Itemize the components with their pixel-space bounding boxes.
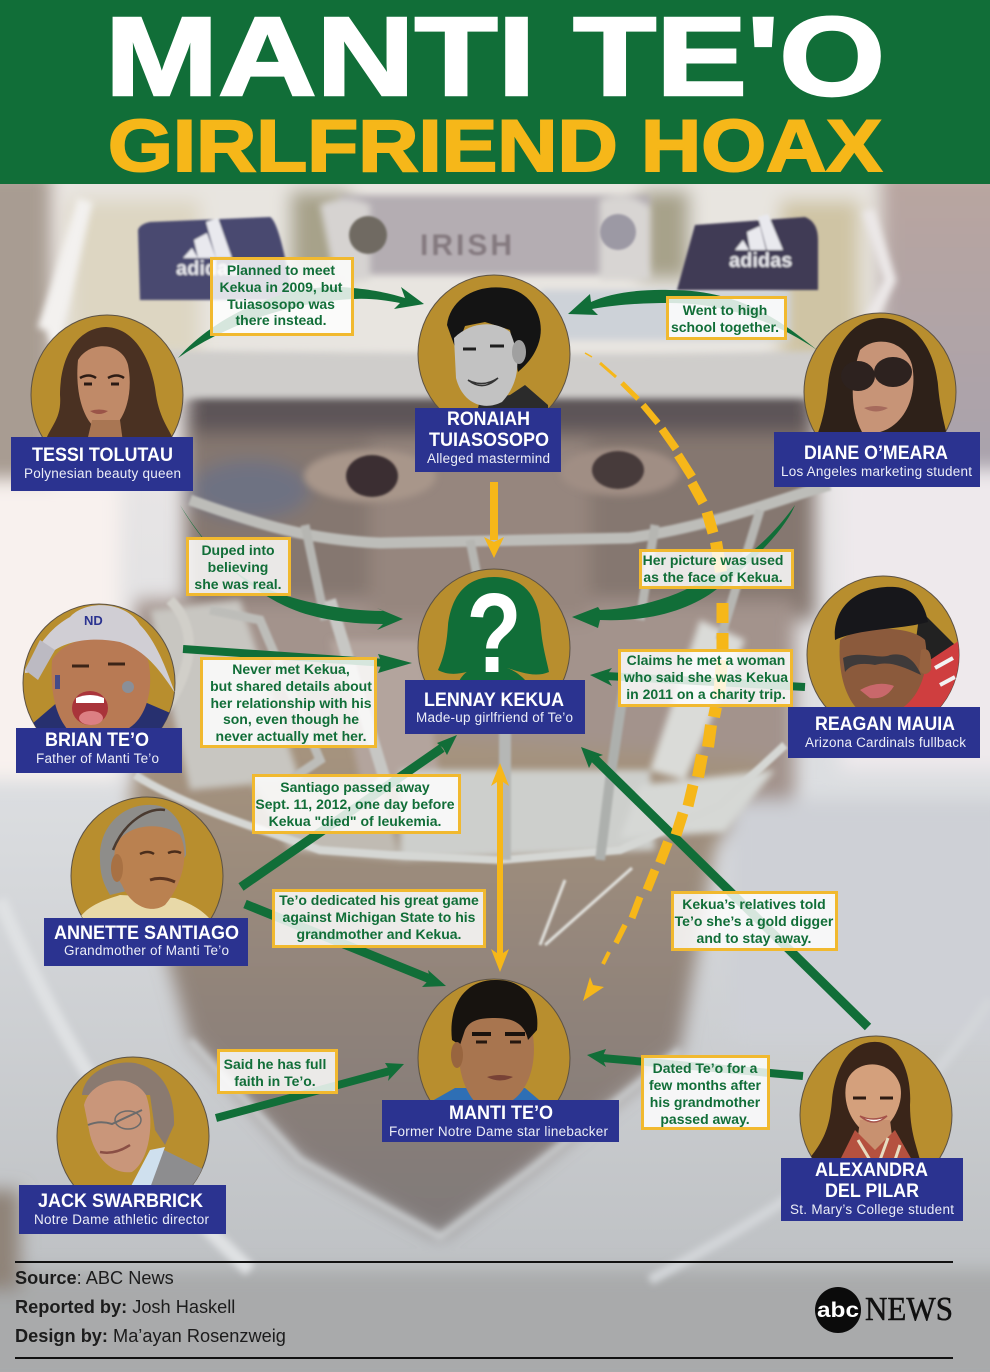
callout: dated Te'o: few months after	[649, 1077, 762, 1093]
label: Annette Santiago	[44, 918, 248, 966]
arrow: Diane to Lennay	[572, 505, 795, 628]
callout: Santiago passed away: Santiago passed away	[280, 779, 430, 795]
arrow: Ronaiah to Lennay, yellow	[484, 482, 504, 558]
label: Annette Santiago: ANNETTE SANTIAGO	[54, 923, 239, 944]
portrait: Annette Santiago	[70, 796, 224, 918]
callout: never met Kekua: never actually met her.	[216, 728, 366, 744]
header banner	[0, 0, 990, 187]
label: Diane O'Meara: DIANE O’MEARA	[804, 443, 948, 464]
portrait: Ronaiah Tuiasosopo	[418, 274, 570, 408]
label: Alexandra del Pilar	[781, 1158, 963, 1221]
callout: went to high school: school together.	[671, 319, 779, 335]
arrow: Annette to Manti	[245, 904, 446, 987]
arrow: Jack to Manti	[216, 1063, 404, 1118]
label: Ronaiah Tuiasosopo: RONAIAH	[447, 409, 530, 430]
icon: green hair silhouette	[438, 577, 549, 690]
arrow: Alexandra to Lennay	[581, 747, 868, 1027]
logo: abc news: abc	[817, 1299, 859, 1322]
label: Brian Te'o: Father of Manti Te’o	[36, 751, 159, 766]
portrait: Reagan Maua	[806, 576, 960, 707]
callout: planned to meet: Planned to meet	[227, 262, 335, 278]
footer credits	[15, 1261, 953, 1359]
callout: relatives	[672, 892, 836, 950]
callout: never met Kekua	[202, 658, 376, 746]
label: Reagan Maua: REAGAN MAUIA	[815, 714, 955, 735]
callout: Santiago passed away	[254, 776, 460, 832]
callout: claims he met a woman: in 2011 on a charity trip.	[626, 686, 786, 702]
callout: her picture: Her picture was used	[643, 552, 783, 568]
callout: dedicated game: grandmother and Kekua.	[297, 926, 461, 942]
portrait: Jack Swarbrick	[56, 1056, 210, 1185]
callout: duped: she was real.	[194, 576, 282, 592]
callout: dedicated game: against Michigan State to his	[283, 909, 476, 925]
callout: dated Te'o	[642, 1056, 768, 1128]
background: faded helmet photo: adidas	[729, 250, 792, 272]
callout: dated Te'o: passed away.	[660, 1111, 750, 1127]
callout: never met Kekua: Never met Kekua,	[232, 661, 350, 677]
callout: full faith: faith in Te’o.	[234, 1073, 316, 1089]
icon: question mark: ?	[466, 569, 522, 696]
portrait: Manti Te'o	[418, 978, 570, 1100]
label: Brian Te'o	[16, 728, 182, 773]
logo: abc news: NEWS	[865, 1291, 953, 1328]
callout: duped	[188, 538, 290, 594]
callout: her picture: as the face of Kekua.	[643, 569, 783, 585]
label: Ronaiah Tuiasosopo: Alleged mastermind	[427, 451, 550, 466]
callout: claims he met a woman: Claims he met a woman	[627, 652, 785, 668]
callout: full faith	[218, 1050, 336, 1092]
callout: went to high school: Went to high	[683, 302, 767, 318]
label: Tessi Tolutau: Polynesian beauty queen	[24, 466, 181, 481]
callout: dated Te'o: his grandmother	[650, 1094, 761, 1110]
callout: planned to meet: there instead.	[235, 312, 327, 328]
label: Alexandra del Pilar: ALEXANDRA	[815, 1160, 928, 1181]
callout: dedicated game: Te’o dedicated his great game	[279, 892, 479, 908]
background: faded helmet photo: IRISH	[420, 229, 515, 262]
label: Tessi Tolutau: TESSI TOLUTAU	[32, 445, 173, 466]
arrow: Tessi to Ronaiah	[178, 287, 424, 358]
arrow: Diane to Ronaiah	[568, 290, 817, 350]
label: Manti Te'o: MANTI TE’O	[449, 1103, 553, 1124]
callout: claims he met a woman: who said she was Kekua	[623, 669, 788, 685]
callout: claims he met a woman	[620, 650, 792, 706]
label: Manti Te'o	[382, 1100, 619, 1142]
label: Lennay Kekua: Made-up girlfriend of Te’o	[416, 710, 573, 725]
label: Alexandra del Pilar: St. Mary’s College student	[790, 1202, 954, 1217]
label: Reagan Maua: Arizona Cardinals fullback	[805, 735, 966, 750]
source: Source: ABC News	[15, 1268, 174, 1288]
label: Ronaiah Tuiasosopo: TUIASOSOPO	[429, 430, 549, 451]
callout: never met Kekua: her relationship with his	[210, 695, 372, 711]
label: Alexandra del Pilar: DEL PILAR	[825, 1181, 919, 1202]
arrow: dashed yellow from Ronaiah to Manti	[583, 353, 722, 1001]
label: Jack Swarbrick: Notre Dame athletic director	[34, 1212, 210, 1227]
callout: dated Te'o: Dated Te’o for a	[653, 1060, 758, 1076]
callout: planned to meet: Tuiasosopo was	[227, 296, 335, 312]
callout: dedicated game	[274, 890, 484, 946]
arrow: Tessi to Lennay	[180, 505, 403, 630]
label: Lennay Kekua: LENNAY KEKUA	[424, 690, 564, 711]
portrait: Lennay Kekua silhouette	[418, 568, 570, 680]
arrow: Lennay and Manti, yellow double	[491, 763, 509, 972]
label: Diane O'Meara	[774, 432, 980, 487]
arrow: Reagan to Lennay	[590, 668, 805, 687]
reported by: Reported by: Josh Haskell	[15, 1297, 235, 1317]
label: Reagan Maua	[788, 707, 980, 758]
callout: full faith: Said he has full	[224, 1056, 326, 1072]
subtitle: GIRLFRIEND HOAX	[108, 106, 882, 187]
label: Lennay Kekua	[405, 680, 585, 734]
label: Tessi Tolutau	[11, 437, 193, 491]
portrait: Alexandra del Pilar	[800, 1036, 952, 1158]
callout: planned to meet: Kekua in 2009, but	[220, 279, 343, 295]
callout: never met Kekua: son, even though he	[223, 711, 359, 727]
arrows: relationship connectors	[178, 287, 868, 1118]
label: Annette Santiago: Grandmother of Manti Te’o	[64, 943, 229, 958]
background: faded helmet photo: adidas	[176, 258, 239, 280]
label: Brian Te'o: BRIAN TE’O	[45, 730, 149, 751]
callout: Santiago passed away: Kekua "died" of leukemia.	[269, 813, 441, 829]
label: Ronaiah Tuiasosopo	[415, 408, 561, 472]
callout: relatives: Te’o she’s a gold digger	[675, 913, 834, 929]
label: Diane O'Meara: Los Angeles marketing student	[781, 464, 972, 479]
callout: Santiago passed away: Sept. 11, 2012, one day before	[255, 796, 455, 812]
callout: went to high school	[668, 298, 786, 338]
portrait: Diane O'Meara	[804, 312, 956, 432]
design by: Design by: Ma’ayan Rosenzweig	[15, 1326, 286, 1346]
callout: relatives: Kekua’s relatives told	[682, 896, 826, 912]
portrait: Brian Te'o	[22, 604, 176, 728]
portrait: Brian Te'o: ND	[84, 613, 103, 628]
label: Manti Te'o: Former Notre Dame star linebacker	[389, 1124, 608, 1139]
callout: her picture	[640, 550, 792, 588]
label: Jack Swarbrick	[19, 1185, 226, 1234]
arrow: Annette to Lennay	[241, 735, 457, 887]
callout: duped: believing	[208, 559, 268, 575]
label: Jack Swarbrick: JACK SWARBRICK	[38, 1191, 203, 1212]
portrait: Tessi Tolutau	[30, 314, 184, 437]
arrow: Alexandra to Manti	[587, 1049, 803, 1076]
callout: duped: Duped into	[201, 542, 275, 558]
callout: never met Kekua: but shared details about	[210, 678, 372, 694]
callout: planned to meet	[212, 258, 352, 334]
logo: abc news	[815, 1287, 953, 1333]
callout: relatives: and to stay away.	[697, 930, 811, 946]
arrow: Brian to Lennay	[183, 649, 412, 673]
